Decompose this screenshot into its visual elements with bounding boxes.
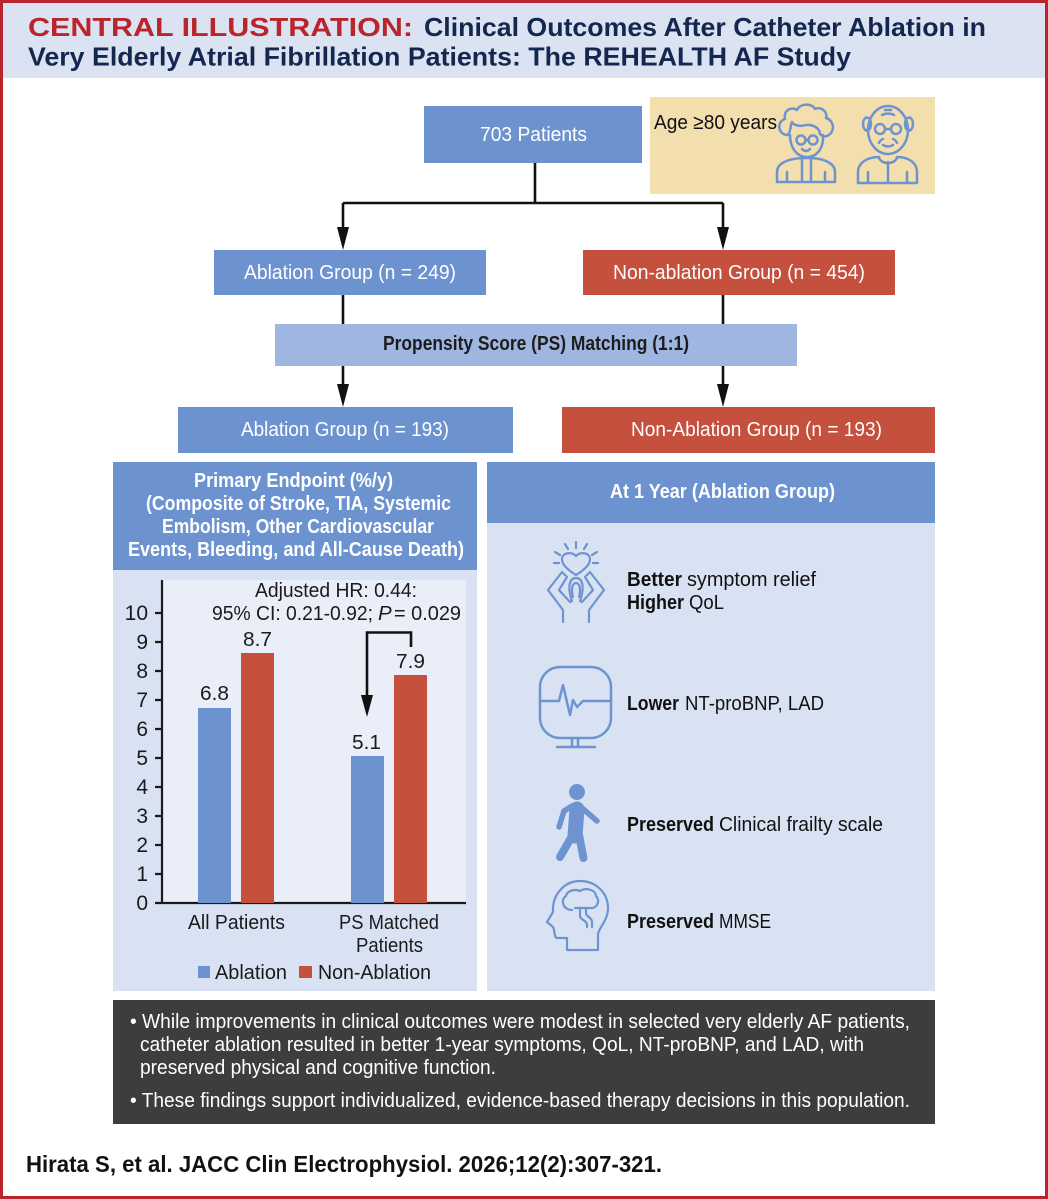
text: MMSE [627,910,771,933]
x-axis labels: PS Matched [339,911,439,934]
y-axis labels: 0 [136,892,148,915]
icon: elderly woman [777,105,835,182]
box: ablation group n=193 [178,407,513,453]
chart legend: Non-Ablation [318,961,431,984]
text: clinical frailty scale: Clinical frailty scale [719,813,883,836]
summary box: preserved physical and cognitive function. [140,1056,496,1079]
panel header: primary endpoint: Events, Bleeding, and All-Cause Death) [128,538,464,561]
bars: PS matched patients [351,650,427,903]
panel: at 1 year [487,462,935,991]
text: symptom relief and QoL: symptom relief [687,568,816,591]
box: 703 patients [424,106,642,163]
y-axis labels: 2 [136,834,148,857]
box: non-ablation group n=454 [583,250,895,295]
text: NT-proBNP and LAD: NT-proBNP, LAD [685,692,824,715]
title band: Clinical Outcomes After Catheter Ablation in [424,12,986,42]
text: symptom relief and QoL: Better [627,568,682,591]
chart legend: Ablation [215,961,287,984]
box: 703 patients: 703 Patients [480,123,587,146]
title band: Very Elderly Atrial Fibrillation Patients: The REHEALTH AF Study [28,42,852,72]
text: symptom relief and QoL [627,568,816,614]
title band: CENTRAL ILLUSTRATION: [28,12,413,42]
y-axis labels: 4 [136,776,148,799]
y-axis labels: 7 [136,689,148,712]
panel header: primary endpoint: Embolism, Other Cardiovascular [162,515,434,538]
panel header: at 1 year: At 1 Year (Ablation Group) [610,480,835,503]
title band [3,3,1045,78]
text: clinical frailty scale [627,813,883,836]
citation: Hirata S, et al. JACC Clin Electrophysiol. 2026;12(2):307-321. [26,1151,662,1177]
bars: all patients [198,628,274,903]
icon: elderly man [858,106,917,183]
y-axis labels: 9 [136,631,148,654]
text: MMSE: MMSE [719,910,771,933]
bars: PS matched patients: 7.9 [396,650,425,673]
box: non-ablation group n=193: Non-Ablation Group (n = 193) [631,418,882,441]
summary box: • While improvements in clinical outcomes were modest in selected very elderly AF patients, [130,1010,910,1033]
y-axis labels [125,602,148,915]
box: propensity score matching [275,324,797,366]
panel: primary endpoint [113,462,477,991]
adjusted hazard ratio annotation [212,579,461,625]
x-axis labels: All Patients [188,911,285,934]
y-axis labels: 5 [136,747,148,770]
text: NT-proBNP and LAD: Lower [627,692,679,715]
box: non-ablation group n=193 [562,407,935,453]
text: symptom relief and QoL: Higher [627,591,684,614]
bars: PS matched patients: 5.1 [352,731,381,754]
adjusted hazard ratio annotation: 95% CI: 0.21-0.92; [212,602,373,625]
y-axis labels: 1 [136,863,148,886]
text: NT-proBNP and LAD [627,692,824,715]
x-axis labels [188,911,439,957]
panel header: at 1 year [487,462,935,523]
panel header: primary endpoint: Primary Endpoint (%/y) [194,469,393,492]
bars: all patients: 6.8 [200,682,229,705]
icon: hands holding heart [548,542,604,622]
panel: age at least 80 years: Age ≥80 years [654,111,777,134]
box: ablation group n=249: Ablation Group (n = 249) [244,261,456,284]
y-axis labels: 8 [136,660,148,683]
icon: head with brain [547,881,608,950]
summary box [113,1000,935,1124]
panel header: primary endpoint: (Composite of Stroke, TIA, Systemic [146,492,451,515]
chart legend [198,961,431,984]
box: ablation group n=193: Ablation Group (n = 193) [241,418,449,441]
summary box: • These findings support individualized, evidence-based therapy decisions in this population. [130,1089,910,1112]
adjusted hazard ratio annotation: P [378,602,392,625]
icon: walking person [559,784,597,858]
adjusted hazard ratio annotation: = 0.029 [394,602,461,625]
panel: age at least 80 years [650,97,935,194]
text: MMSE: Preserved [627,910,714,933]
bar chart [125,579,466,984]
box: ablation group n=249 [214,250,486,295]
box: non-ablation group n=454: Non-ablation Group (n = 454) [613,261,865,284]
icon: heart monitor [540,667,611,747]
adjusted hazard ratio annotation: Adjusted HR: 0.44: [255,579,417,602]
summary box: catheter ablation resulted in better 1-year symptoms, QoL, NT-proBNP, and LAD, with [140,1033,864,1056]
text: symptom relief and QoL: QoL [689,591,724,614]
y-axis labels: 3 [136,805,148,828]
x-axis labels: Patients [356,934,423,957]
flow connectors and arrows [337,163,729,407]
text: clinical frailty scale: Preserved [627,813,714,836]
arrow: comparison bracket [361,632,411,717]
panel header: primary endpoint [113,462,477,570]
box: propensity score matching: Propensity Score (PS) Matching (1:1) [383,332,689,355]
bars: all patients: 8.7 [243,628,272,651]
y-axis labels: 6 [136,718,148,741]
y-axis labels: 10 [125,602,148,625]
